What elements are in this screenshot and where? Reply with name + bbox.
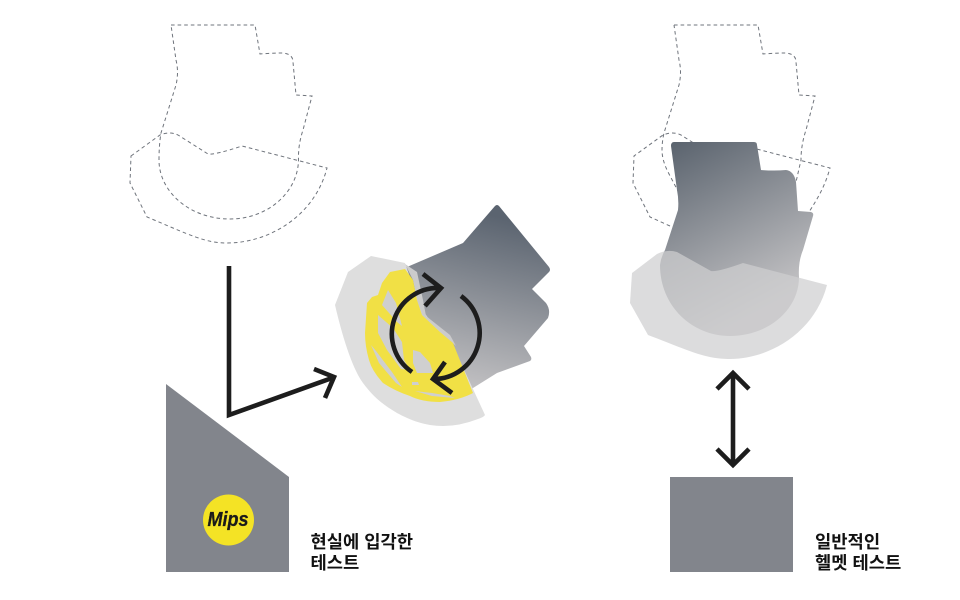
rotated head with gradient [400, 205, 550, 400]
yellow overlap area with holes [365, 264, 473, 402]
right-angle arrow [229, 266, 334, 415]
dashed head [159, 25, 312, 219]
dashed head, upper [674, 25, 815, 182]
left dashed outline: head and helmet [130, 25, 327, 243]
left caption: 테스트 [310, 553, 359, 573]
left caption: 현실에 입각한 [310, 532, 413, 552]
rotation arrows [392, 274, 480, 393]
left grey block [166, 384, 289, 572]
right caption: 헬멧 테스트 [815, 553, 901, 573]
arc arrow two [433, 296, 480, 393]
double-headed arrow [717, 373, 749, 465]
right solid helmet, translucent [630, 251, 827, 359]
grey cut-outs [371, 290, 455, 398]
arc arrow one [392, 274, 441, 372]
dashed helmet [130, 133, 327, 243]
right dashed outline: head and helmet [633, 25, 830, 226]
Mips logo badge [203, 494, 254, 546]
right solid head with gradient [660, 142, 813, 336]
rotated helmet, light grey [335, 256, 485, 426]
dashed helmet [633, 133, 830, 226]
right grey block [670, 477, 793, 572]
right caption: 일반적인 [815, 532, 880, 552]
Mips wordmark: Mips [208, 509, 248, 531]
